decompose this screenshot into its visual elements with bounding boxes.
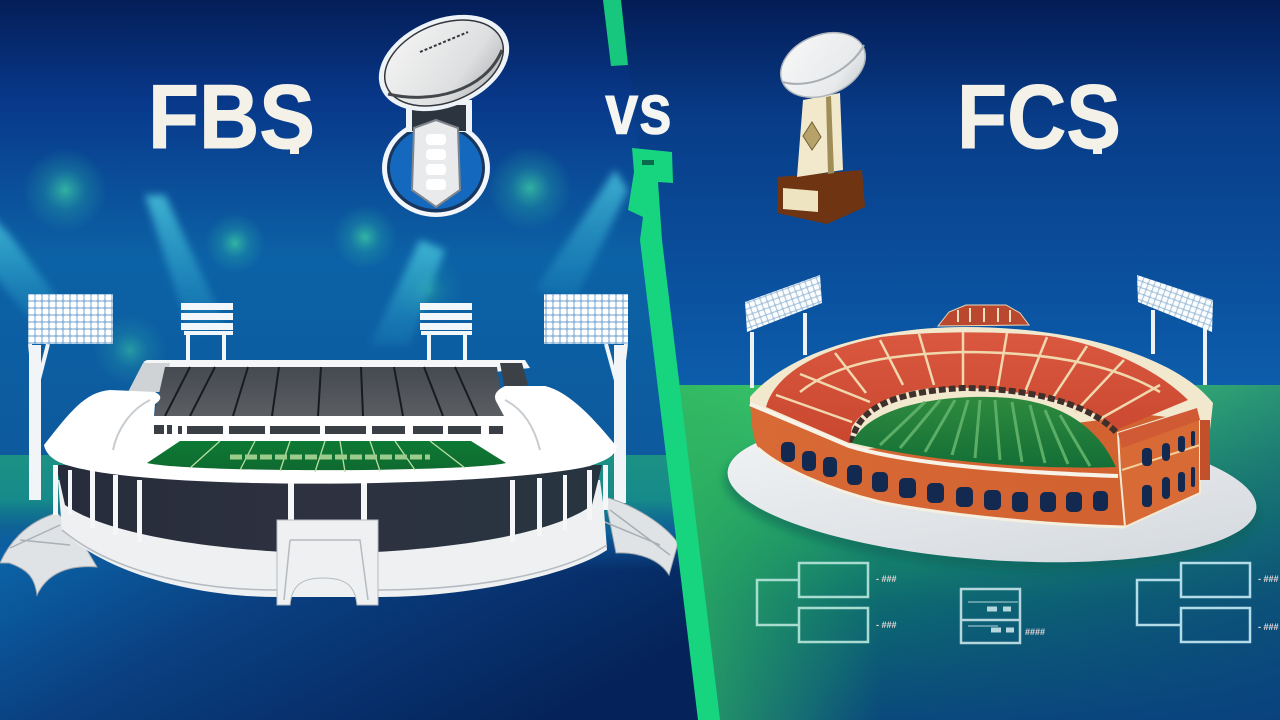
bracket: center playoff bracket: [961, 589, 1020, 643]
divider: green diagonal line: [603, 0, 720, 720]
icon: FCS trophy: [771, 21, 875, 224]
illustration: FCS floodlights: [745, 275, 1213, 388]
illustration: FCS stadium on white plate: [720, 305, 1264, 588]
heading: FBS: FBS: [148, 67, 315, 168]
panel: FCS right background: [621, 0, 1280, 720]
heading: vs: vs: [605, 70, 672, 150]
icon: FBS football trophy badge: [364, 0, 524, 217]
labels: bracket scores: - ###: [876, 620, 897, 630]
illustration: FBS floodlights: [28, 294, 628, 503]
bracket: left playoff bracket: [757, 563, 868, 642]
panel: FBS left background: [0, 0, 720, 720]
labels: bracket scores: - ###: [876, 574, 897, 584]
labels: bracket scores: - ###: [1258, 574, 1279, 584]
heading: FCS: FCS: [957, 67, 1121, 168]
labels: bracket scores: [876, 574, 1279, 637]
labels: bracket scores: - ###: [1258, 622, 1279, 632]
illustration: FBS stadium: [0, 360, 678, 605]
bracket: right playoff bracket: [1137, 563, 1250, 642]
labels: bracket scores: ####: [1025, 627, 1045, 637]
